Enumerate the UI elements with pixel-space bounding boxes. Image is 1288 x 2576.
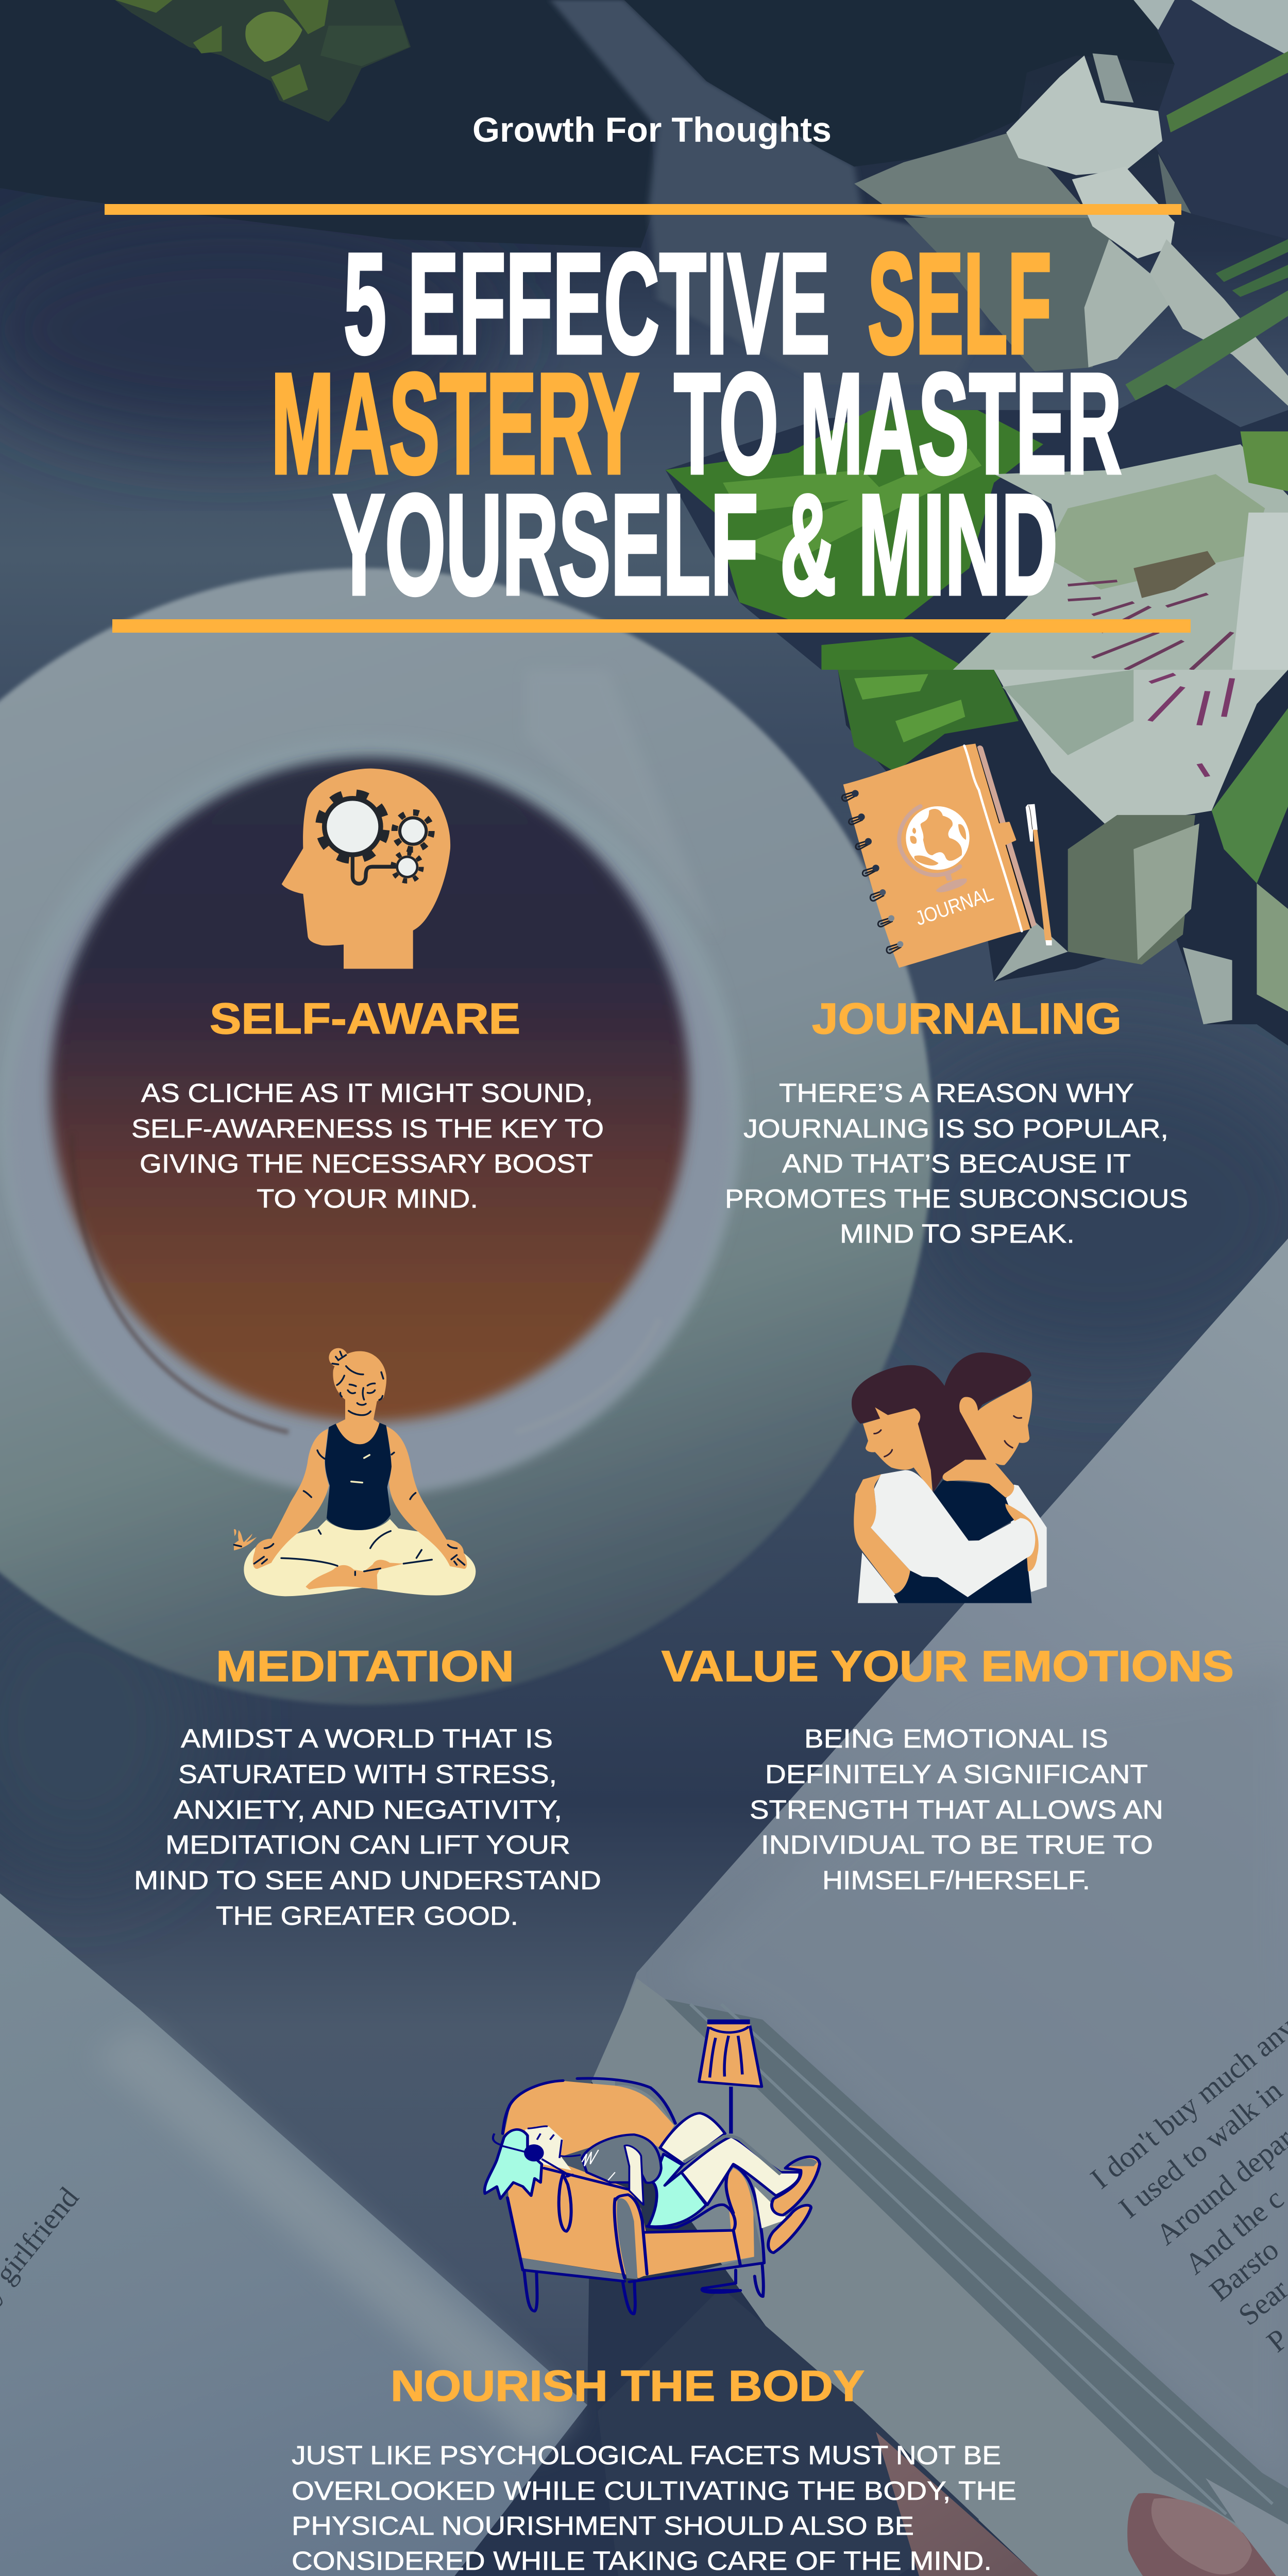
printed text on right page: Barsto [1203,2232,1285,2308]
body text: INDIVIDUAL TO BE TRUE TO [761,1830,1153,1859]
left book page [0,1893,587,2576]
body text: MIND TO SPEAK. [840,1219,1075,1248]
panel: meditation [134,1348,601,1930]
icon: journal and pen [842,743,1052,968]
body text: AMIDST A WORLD THAT IS [181,1724,553,1753]
body text: AS CLICHE AS IT MIGHT SOUND, [141,1078,593,1108]
body text: SELF-AWARENESS IS THE KEY TO [131,1114,604,1143]
body text: JOURNALING IS SO POPULAR, [743,1114,1168,1143]
body text [750,1724,1163,1895]
body text: OVERLOOKED WHILE CULTIVATING THE BODY, THE [292,2476,1016,2505]
body text [725,1078,1188,1248]
body text: SATURATED WITH STRESS, [178,1759,557,1789]
body text: AND THAT’S BECAUSE IT [782,1149,1131,1178]
title: 5 EFFECTIVE [344,223,830,383]
top leaves and flowers [0,0,1288,670]
body text: TO YOUR MIND. [257,1184,478,1213]
body text: JUST LIKE PSYCHOLOGICAL FACETS MUST NOT BE [292,2441,1001,2470]
heading: JOURNALING [812,994,1122,1043]
printed text on right page [1084,2010,1288,2359]
icon: head with gears [282,769,450,969]
heading: NOURISH THE BODY [391,2362,865,2410]
body text: MEDITATION CAN LIFT YOUR [165,1830,570,1859]
heading: VALUE YOUR EMOTIONS [662,1642,1234,1690]
title: MASTERY [271,343,639,503]
site name: Growth For Thoughts [472,110,832,149]
body text: MIND TO SEE AND UNDERSTAND [134,1866,601,1895]
bottom rule [112,619,1191,633]
body text: HIMSELF/HERSELF. [822,1866,1090,1895]
icon: two people hugging [852,1352,1047,1603]
panel: journaling [725,743,1188,1248]
printed text on right page: And the c [1178,2182,1288,2281]
heading: SELF-AWARE [210,994,520,1043]
title: SELF [868,223,1052,383]
body text [134,1724,601,1930]
icon: person relaxing in armchair [485,2022,820,2314]
printed text on right page: I used to walk in [1112,2073,1288,2225]
body text: ANXIETY, AND NEGATIVITY, [174,1795,562,1824]
title [271,223,1122,624]
body text: PHYSICAL NOURISHMENT SHOULD ALSO BE [292,2511,914,2540]
saucer and coffee cup [0,568,933,1705]
body text [131,1078,604,1213]
icon: meditating woman [234,1348,476,1596]
body text: DEFINITELY A SIGNIFICANT [765,1759,1148,1789]
panel: nourish the body [292,2022,1016,2575]
body text: BEING EMOTIONAL IS [804,1724,1108,1753]
body text: GIVING THE NECESSARY BOOST [140,1149,593,1178]
body text: STRENGTH THAT ALLOWS AN [750,1795,1163,1824]
body text: THERE’S A REASON WHY [779,1078,1134,1108]
panel: value your emotions [662,1352,1234,1895]
icon: journal and pen: JOURNAL [912,883,996,930]
body text: PROMOTES THE SUBCONSCIOUS [725,1184,1188,1213]
top rule [105,204,1181,215]
body text: THE GREATER GOOD. [216,1901,518,1930]
panel: self-aware [131,769,604,1213]
right book page [353,1239,1288,2576]
body text: CONSIDERED WHILE TAKING CARE OF THE MIND. [292,2546,992,2575]
body text [292,2441,1016,2575]
heading: MEDITATION [216,1642,514,1690]
